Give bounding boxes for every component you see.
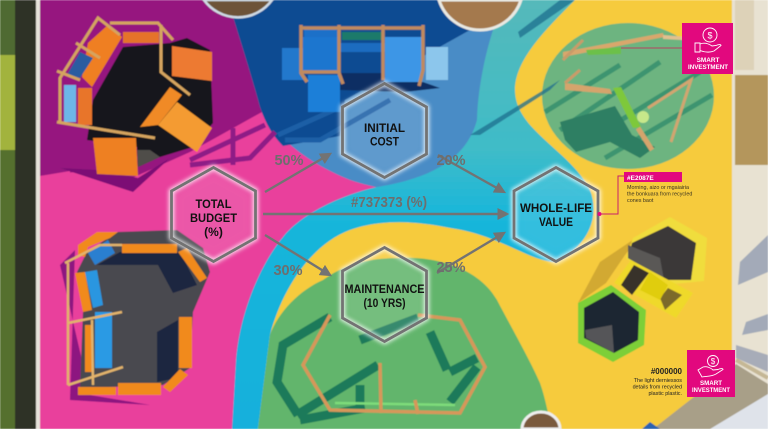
- label: 50%: 50%: [274, 152, 304, 169]
- node text: VALUE: [539, 215, 573, 229]
- pink patches in shadow: [40, 171, 70, 196]
- grass and fence on left: [0, 0, 40, 429]
- badge: smart investment bottom: [687, 350, 735, 397]
- right concrete and garden: [730, 0, 768, 429]
- cast shadows on upper right: [545, 62, 712, 158]
- playground: orange top-left: [57, 18, 213, 192]
- arrow: budget to whole-life value: [263, 213, 507, 215]
- callout: black colour code: The light derniessos: [634, 378, 682, 384]
- node: total budget: [172, 168, 256, 262]
- arrow: budget to initial cost: [265, 154, 330, 192]
- icon: coin over hand: [698, 356, 723, 377]
- arrow: budget to maintenance: [265, 235, 330, 275]
- node text: TOTAL: [196, 197, 232, 211]
- label: 20%: 20%: [436, 152, 466, 169]
- flow arrows: [263, 154, 507, 275]
- shadowed purple area: [40, 0, 262, 178]
- lattice shadow on blue: [278, 100, 390, 140]
- node: initial cost: [342, 84, 426, 178]
- label: 30%: 30%: [274, 262, 302, 279]
- playground: wooden frame on green: [277, 315, 485, 420]
- node text: BUDGET: [190, 211, 238, 225]
- arrow: initial cost to whole-life value: [438, 155, 504, 192]
- callout: black colour code: [633, 367, 683, 397]
- callout: pink colour code: the bonkuara from recycled: [627, 192, 692, 198]
- node text: COST: [370, 134, 400, 148]
- top planter left: [204, 0, 272, 17]
- callout: black colour code: plastic plastic.: [648, 391, 682, 397]
- shadow streaks on teal: [470, 0, 575, 135]
- lattice shadow on pink: [190, 125, 275, 165]
- teal zone with bands: [232, 0, 732, 429]
- badge text: INVESTMENT: [692, 387, 730, 394]
- node text: INITIAL: [364, 121, 405, 135]
- badge text: INVESTMENT: [688, 64, 728, 71]
- yellow zone: [258, 0, 732, 429]
- badge text: SMART: [700, 380, 722, 387]
- green zone lower: [258, 258, 552, 429]
- building roof bottom-right: [642, 360, 768, 429]
- callout: black colour code: details from recycled: [633, 384, 682, 390]
- badge: smart investment top: [682, 23, 733, 74]
- blue zone: [228, 0, 520, 188]
- playground: blue top-centre: [282, 25, 448, 112]
- dark blue shadow: [228, 0, 470, 146]
- playground: hexagon benches bottom-right: [578, 217, 707, 362]
- dark shadow upper right: [560, 106, 655, 158]
- node text: MAINTENANCE: [344, 282, 424, 296]
- callout: pink colour code: cones baot: [627, 198, 654, 204]
- arrow: maintenance to whole-life value: [437, 233, 504, 273]
- top planter right: [439, 0, 521, 30]
- playground: orange and blue bottom-left: [60, 230, 210, 405]
- callout: pink colour code: #E2087E: [627, 175, 654, 182]
- green zone upper right: [542, 23, 714, 169]
- bottom planter: [522, 412, 560, 429]
- label: centre colour code: #737373 (%): [351, 194, 427, 211]
- dollar sign: $: [707, 30, 713, 40]
- node: maintenance: [342, 248, 426, 342]
- percentage labels: [274, 152, 466, 279]
- label: 25%: 25%: [436, 259, 466, 276]
- callout: black colour code: #000000: [651, 367, 683, 376]
- node text: WHOLE-LIFE: [520, 201, 592, 215]
- callout: pink colour code: Morning, aizo or mgaiairia: [627, 185, 689, 191]
- playground: wooden frame top-right: [563, 33, 700, 150]
- connector line to top badge: [621, 47, 682, 49]
- node text: (%): [204, 225, 223, 239]
- dollar sign: $: [711, 357, 716, 366]
- icon: coin over hand: [695, 28, 721, 52]
- node: whole-life value: [514, 168, 598, 262]
- callout: pink colour code: [598, 172, 692, 216]
- node text: (10 YRS): [364, 296, 406, 310]
- badge text: SMART: [697, 57, 719, 64]
